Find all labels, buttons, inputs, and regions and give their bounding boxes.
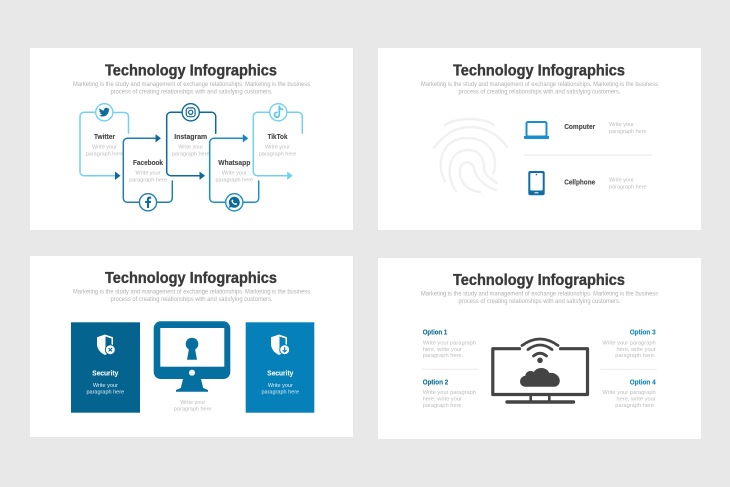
option 2: paragraph here.	[423, 403, 464, 409]
title: Technology Infographics	[105, 270, 277, 287]
icon: monitor with keyhole	[154, 321, 230, 392]
option 4: here, write your	[616, 396, 656, 402]
card: right security: Security	[267, 370, 293, 377]
option 2: here, write your	[423, 396, 462, 402]
icon: facebook f	[145, 197, 151, 208]
option 4: Option 4	[630, 379, 656, 386]
step: Twitter: Write your	[92, 144, 117, 150]
subtitle	[421, 291, 658, 305]
step: Whatsapp: Whatsapp	[218, 160, 250, 167]
step: Facebook: Write your	[136, 170, 161, 176]
label: computer: Computer	[564, 124, 595, 131]
step: Instagram: Write your	[178, 144, 203, 150]
subtitle: Marketing is the study and management of exchange relationships. Marketing is the business	[73, 289, 310, 296]
option 2: Write your paragraph	[423, 390, 476, 396]
option 4	[602, 379, 656, 409]
icon: shield with cross	[97, 334, 116, 355]
step: TikTok: Write your	[265, 144, 290, 150]
title: Technology Infographics	[105, 62, 277, 80]
icon: shield with arrow	[271, 334, 290, 355]
text: monitor description: paragraph here	[174, 407, 212, 413]
subtitle	[73, 81, 310, 96]
title: Technology Infographics	[453, 62, 625, 80]
subtitle: process of creating relationships with and satisfying customers.	[110, 88, 273, 96]
text: cellphone description: Write your	[609, 178, 634, 184]
option 3: paragraph here.	[615, 353, 656, 359]
step: TikTok: TikTok	[268, 134, 288, 141]
subtitle	[421, 81, 658, 96]
icon: whatsapp	[229, 197, 240, 208]
icon: instagram	[186, 108, 195, 117]
card: left security: Security	[92, 370, 118, 377]
icon: tiktok note	[274, 106, 283, 117]
subtitle: Marketing is the study and management of exchange relationships. Marketing is the business	[421, 291, 658, 298]
panel: security	[30, 256, 353, 437]
step: Facebook: paragraph here	[129, 178, 167, 184]
option 1: Write your paragraph	[423, 340, 476, 346]
option 1: here, write your	[423, 347, 462, 353]
step: Whatsapp: Write your	[222, 170, 247, 176]
icon: twitter bird	[99, 108, 110, 117]
option 3: Write your paragraph	[602, 340, 656, 346]
option 1: paragraph here.	[423, 353, 464, 359]
text: computer description: paragraph here	[609, 129, 647, 135]
step: TikTok: paragraph here	[259, 152, 296, 158]
subtitle: Marketing is the study and management of exchange relationships. Marketing is the business	[73, 81, 310, 88]
icon: cellphone	[528, 171, 545, 195]
step: Instagram: Instagram	[174, 134, 207, 141]
text: monitor description	[174, 400, 212, 413]
card: right security: Write your	[268, 383, 293, 389]
icon: fingerprint	[434, 119, 507, 192]
option 3: here, write your	[616, 347, 656, 353]
option 3	[602, 330, 656, 359]
subtitle: process of creating relationships with and satisfying customers.	[110, 296, 273, 303]
step: Facebook	[123, 134, 172, 211]
step: Instagram	[167, 104, 216, 180]
text: computer description	[609, 122, 647, 135]
option 4: paragraph here.	[615, 403, 656, 409]
card: right security	[246, 322, 314, 413]
option 2	[423, 379, 476, 409]
card: left security: paragraph here	[86, 390, 124, 396]
panel: devices	[378, 48, 701, 230]
option 1	[423, 330, 476, 359]
title: Technology Infographics	[453, 272, 625, 289]
icon: laptop	[524, 122, 549, 139]
card: left security	[71, 322, 140, 413]
option 1: Option 1	[423, 330, 447, 337]
text: cellphone description	[609, 178, 647, 190]
text: cellphone description: paragraph here	[609, 184, 647, 190]
step: Whatsapp	[210, 134, 259, 211]
text: computer description: Write your	[609, 122, 634, 128]
text: monitor description: Write your	[180, 400, 205, 406]
option 2: Option 2	[423, 379, 448, 386]
option 3: Option 3	[630, 330, 656, 337]
subtitle: Marketing is the study and management of exchange relationships. Marketing is the business	[421, 81, 658, 88]
option 4: Write your paragraph	[602, 390, 656, 396]
step: Instagram: paragraph here	[172, 152, 210, 158]
step: Twitter: Twitter	[94, 134, 115, 141]
step: Twitter	[80, 104, 128, 180]
step: TikTok	[253, 104, 302, 180]
panel: cloud options	[378, 258, 701, 439]
step: Whatsapp: paragraph here	[215, 178, 253, 184]
subtitle	[73, 289, 310, 303]
label: cellphone: Cellphone	[564, 180, 595, 187]
panel: social media flow	[30, 48, 353, 230]
card: right security: paragraph here	[261, 390, 299, 396]
card: left security: Write your	[93, 383, 118, 389]
subtitle: process of creating relationships with and satisfying customers.	[458, 88, 621, 96]
step: Facebook: Facebook	[133, 160, 163, 167]
icon: monitor with cloud and wifi	[493, 339, 588, 402]
subtitle: process of creating relationships with and satisfying customers.	[458, 298, 621, 305]
step: Twitter: paragraph here	[86, 152, 123, 158]
